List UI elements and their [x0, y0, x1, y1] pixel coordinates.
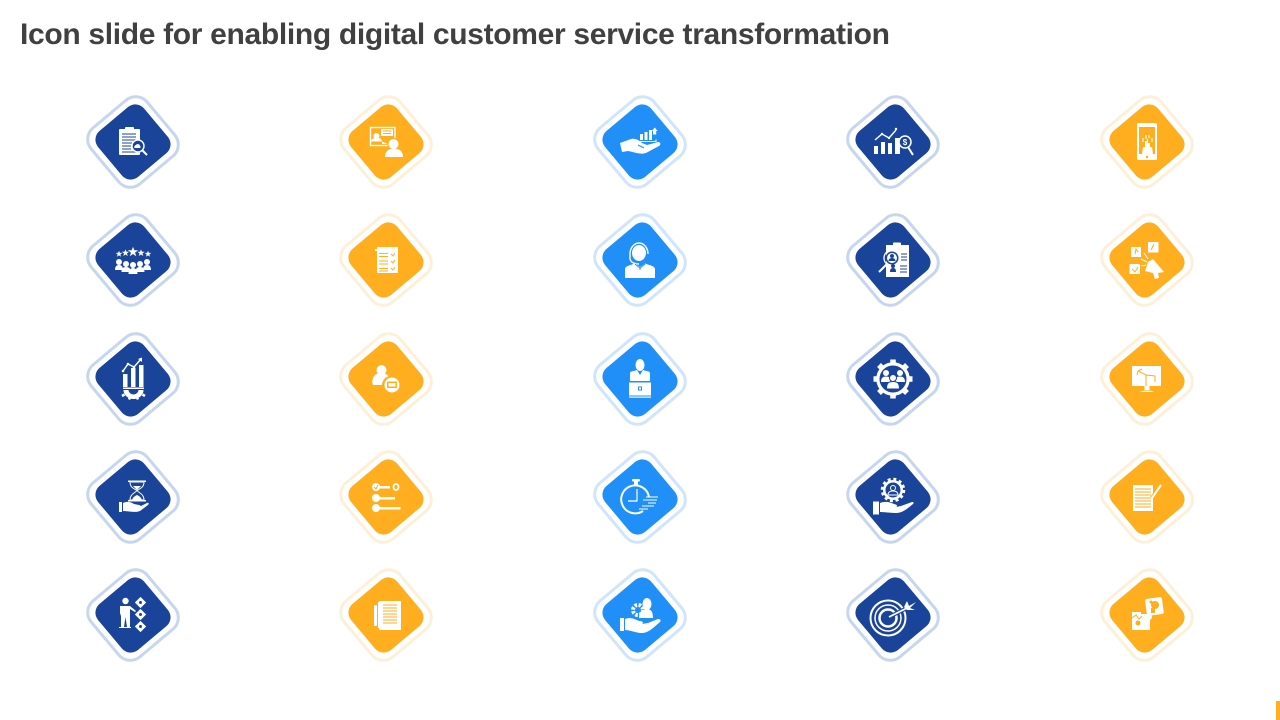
icon: presenter: [370, 128, 403, 157]
tile: document list: [335, 209, 437, 311]
tile: hourglass on hand: [82, 446, 184, 548]
tile: notes and pencil: [1096, 446, 1198, 548]
icon: fast stopwatch: [621, 479, 658, 513]
icon: user device: [372, 365, 400, 394]
tile: stopwatch: [589, 446, 691, 548]
tile: presenter and screen: [335, 91, 437, 193]
icon: checklist: [372, 483, 400, 512]
tile: hand with person and gear: [589, 564, 691, 666]
icon: documents: [374, 601, 401, 630]
icon: hourglass hand: [119, 480, 149, 512]
tile: puzzle and idea: [1096, 564, 1198, 666]
tile: person with process steps: [82, 564, 184, 666]
tile: person at laptop: [589, 328, 691, 430]
icon: financial analysis: $: [903, 138, 908, 147]
icon: monitor: [1132, 366, 1161, 392]
corner tab: [1276, 701, 1280, 720]
icon: headset agent: [625, 243, 655, 278]
icon: hand person gear: [620, 598, 661, 633]
tile: gear person on hand: [842, 446, 944, 548]
icon: clipboard search: [119, 127, 147, 155]
icon: target: [870, 600, 916, 636]
tile: team in gear: [842, 328, 944, 430]
icon: megaphone: [1130, 242, 1164, 279]
tile: person with device: [335, 328, 437, 430]
tile: clipboard with magnifier: [82, 91, 184, 193]
tile: gear with bar chart: [82, 328, 184, 430]
icon: hand gear person: [873, 479, 914, 514]
tile: paper stack: [335, 564, 437, 666]
icon: profile review: [879, 242, 909, 277]
tile: monitor: [1096, 328, 1198, 430]
icon: hand and bars: [620, 128, 660, 154]
tile: candidate clipboard search: [842, 209, 944, 311]
tile: megaphone with notes: [1096, 209, 1198, 311]
tile: customer support agent: [589, 209, 691, 311]
tile: checklist: [335, 446, 437, 548]
icon: steps person: [119, 597, 146, 632]
icon: rating and people: [115, 247, 151, 274]
icon: phone: [1137, 123, 1157, 160]
icon: employee laptop: [629, 359, 651, 398]
icon: gear chart: [122, 358, 145, 400]
tile: five star customers: [82, 209, 184, 311]
icon: document: [375, 247, 398, 273]
icon: gear team: [874, 360, 912, 398]
tile: chart with dollar magnifier: [842, 91, 944, 193]
tile: target with arrow: [842, 564, 944, 666]
tile: hand with growth chart: [589, 91, 691, 193]
tile: smartphone: [1096, 91, 1198, 193]
icon: puzzle idea: [1132, 597, 1164, 630]
title: Icon slide for enabling digital customer service transformation: [20, 18, 890, 51]
icon: notepad pencil: [1133, 485, 1161, 511]
